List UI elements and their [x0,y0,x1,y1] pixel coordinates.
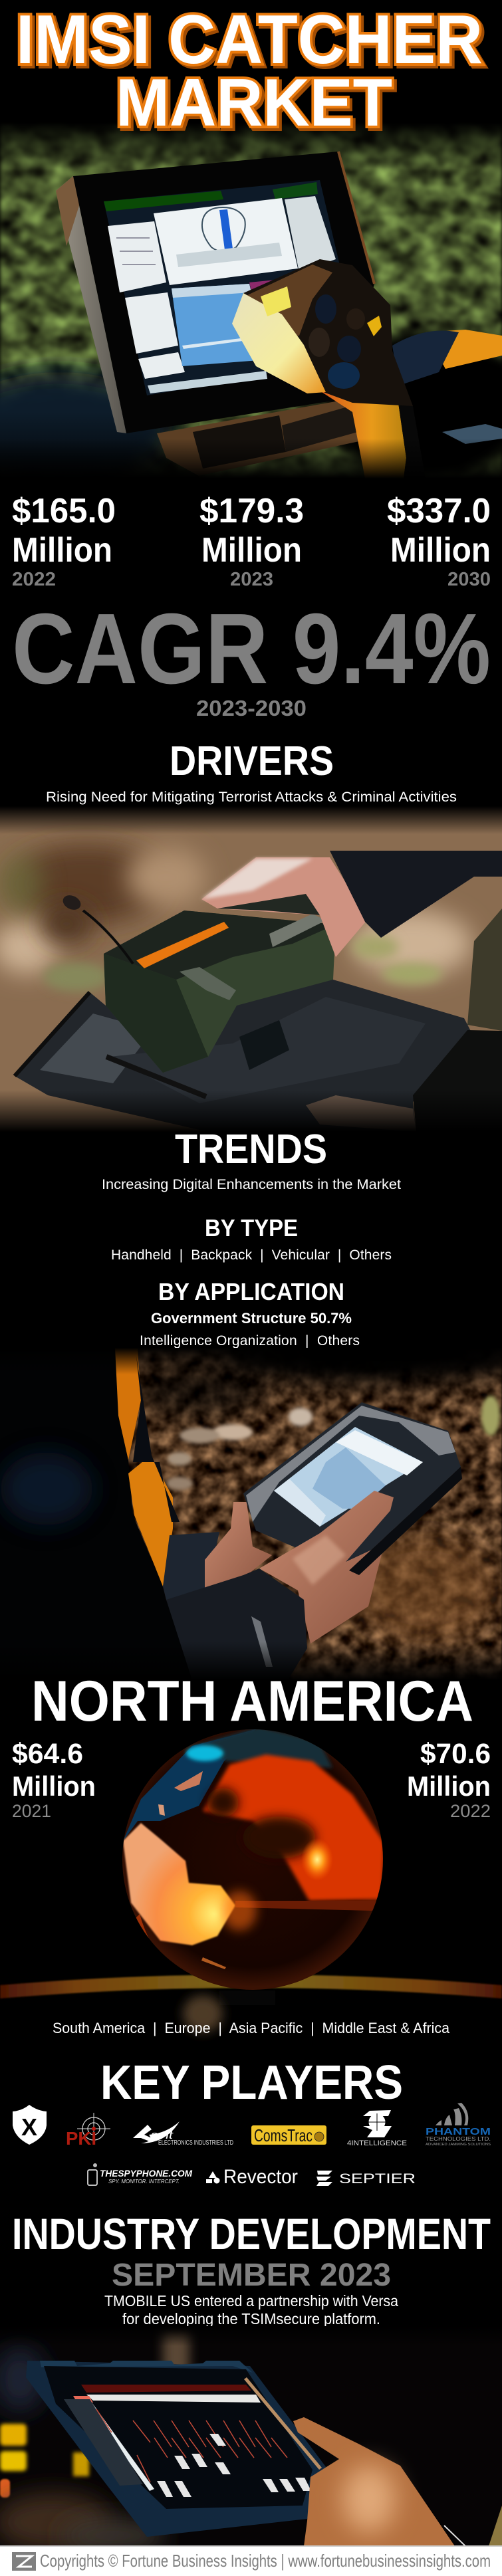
title: IMSI CATCHER [16,1,483,78]
logo: Septier: SEPTIER [339,2171,416,2187]
CAGR period: 2023-2030 [196,696,307,720]
stat: 2023 market value: 2023 [230,569,273,590]
globe on a glowing table [0,1727,502,2032]
development photo: tablet with mixer interface [0,2326,502,2552]
other regions: South America | Europe | Asia Pacific | Middle East & Africa [53,2020,450,2036]
heading: by type: BY TYPE [205,1214,298,1241]
logo: Phantom Technologies: PHANTOM [426,2126,491,2137]
heading: by application: BY APPLICATION [158,1278,344,1305]
logo: TheSpyPhone [88,2163,192,2185]
stat: 2023 market value [199,492,304,590]
stat: 2022 market value: 2022 [12,569,56,590]
development text: for developing the TSIMsecure platform. [122,2310,380,2327]
stat: 2023 market value: $179.3 [199,492,304,530]
application photo: handheld device held over gravel [0,1326,502,1680]
stat: 2022 market value: Million [12,531,112,570]
logo: Phantom Technologies [426,2103,491,2147]
stat: 2022 market value [12,492,116,590]
heading: trends: TRENDS [175,1127,327,1172]
leading application share: Government Structure 50.7% [151,1310,352,1327]
title: MARKET [116,66,392,140]
heading: key players: KEY PLAYERS [100,2056,403,2109]
development text: TMOBILE US entered a partnership with Versa [104,2292,398,2309]
stat: North America 2022: 2022 [450,1801,491,1821]
stat: 2030 market value: 2030 [447,569,491,590]
stat: North America 2021: Million [12,1771,96,1802]
drivers text: Rising Need for Mitigating Terrorist Attacks & Criminal Activities [46,790,457,805]
logo: shield X [13,2105,47,2145]
stat: North America 2022: Million [407,1771,491,1802]
stat: North America 2021: 2021 [12,1801,51,1821]
heading: north america: NORTH AMERICA [31,1669,473,1733]
logo: PKI [66,2113,110,2149]
logo: 4Intelligence: 4INTELLIGENCE [347,2139,407,2147]
logo: shield X: X [21,2113,37,2141]
stat: 2030 market value [387,492,491,590]
logo: Kavit Electronics [133,2121,233,2147]
logo: ComsTrac: ComsTrac [254,2125,313,2145]
hero photo: in-cab display and joystick [0,122,502,492]
heading: drivers: DRIVERS [170,738,334,784]
stat: 2030 market value: $337.0 [387,492,491,530]
by type list: Handheld | Backpack | Vehicular | Others [111,1247,392,1263]
stat: 2023 market value: Million [201,531,302,570]
footer logo [12,2552,36,2571]
stat: North America 2022 [407,1738,491,1821]
stat: 2022 market value: $165.0 [12,492,116,530]
stat: 2030 market value: Million [390,531,491,570]
stat: North America 2022: $70.6 [420,1738,491,1770]
logo: Kavit Electronics: avit [150,2129,174,2141]
logo: PKI: PKI [66,2128,96,2149]
stat: North America 2021: $64.6 [12,1738,83,1770]
logo: TheSpyPhone: THESPYPHONE.COM [100,2168,192,2179]
development date: SEPTEMBER 2023 [112,2258,391,2293]
footer bar [0,2545,502,2576]
logo: Phantom Technologies: ADVANCED JAMMING SOLUTIONS [426,2143,491,2147]
logo: TheSpyPhone: SPY. MONITOR. INTERCEPT. [108,2179,180,2185]
logo: Kavit Electronics: ELECTRONICS INDUSTRIES LTD [158,2139,233,2147]
logo: Phantom Technologies: TECHNOLOGIES LTD. [426,2135,491,2142]
drivers photo: rugged device on a case [0,806,502,1132]
logo: 4Intelligence [347,2110,407,2147]
stat: North America 2021 [12,1738,96,1821]
logo: Septier [316,2171,416,2187]
title [16,1,483,140]
logo: Revector: Revector [223,2166,298,2188]
trends text: Increasing Digital Enhancements in the Market [102,1177,401,1192]
development text [104,2292,398,2327]
other applications: Intelligence Organization | Others [140,1333,360,1348]
